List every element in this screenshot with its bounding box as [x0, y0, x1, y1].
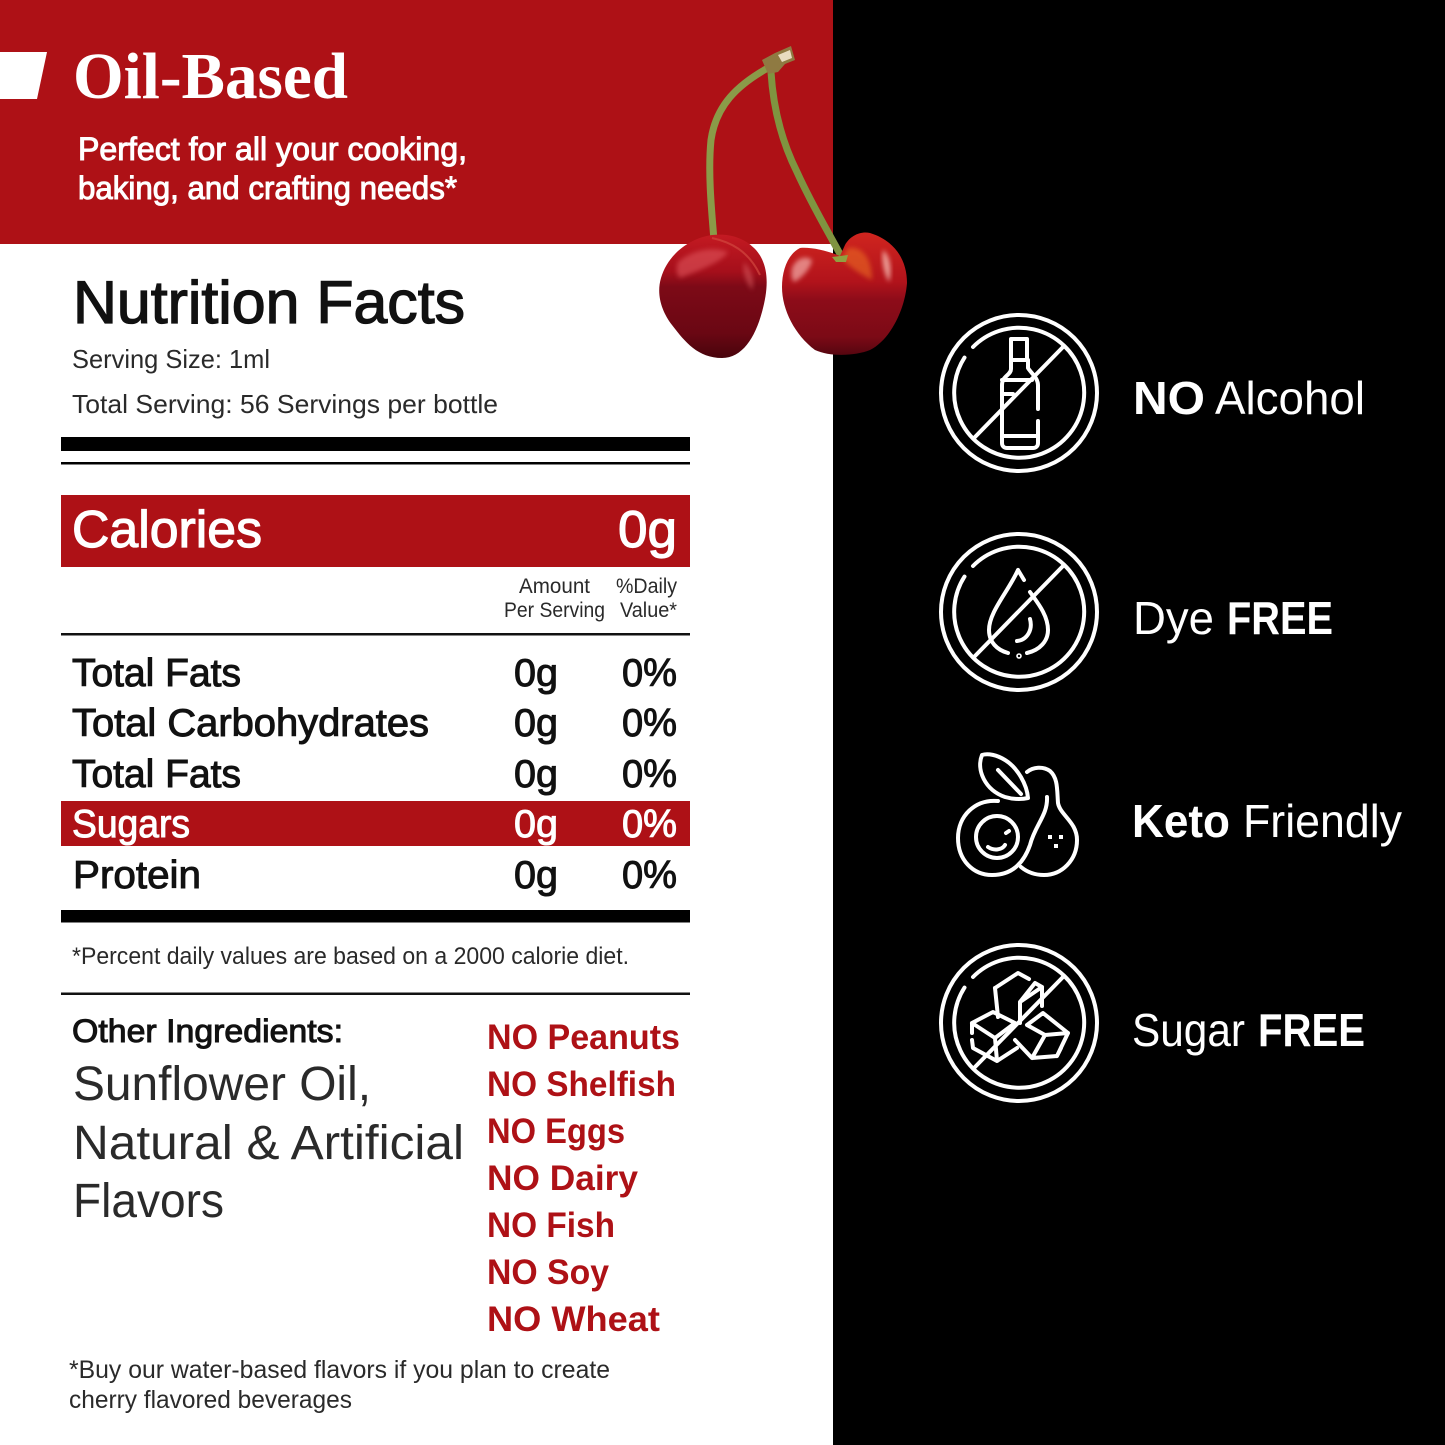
icon: avocado keto friendly [958, 754, 1077, 875]
column headers: Per Serving [504, 599, 605, 622]
text: percent daily value note: *Percent daily values are based on a 2000 calorie diet. [72, 943, 629, 970]
calories bar: 0g [618, 501, 677, 559]
nutrition table [61, 652, 690, 897]
cherry stem left [710, 69, 766, 240]
list: allergen free claims: NO Peanuts [487, 1018, 680, 1057]
text: other ingredients: Flavors [73, 1175, 224, 1228]
label: Sugar FREE [1132, 1004, 1365, 1056]
row: Total Carbohydrates: 0g [514, 702, 558, 745]
text: serving information: Serving Size: 1ml [72, 344, 270, 374]
text: other ingredients [72, 1013, 464, 1228]
label: NO Alcohol: NO [1133, 372, 1205, 424]
column headers: %Daily [616, 575, 677, 598]
row: Total Fats [72, 652, 677, 695]
row: Total Fats second [72, 753, 677, 796]
panel: red header [0, 0, 833, 244]
panel: white nutrition background [0, 244, 833, 1445]
row: Protein: Protein [73, 854, 201, 897]
row: Sugars highlighted: Sugars [72, 803, 190, 846]
row: Total Carbohydrates [72, 702, 677, 745]
row: Protein: 0g [514, 854, 558, 897]
row: Total Fats: 0% [622, 652, 677, 695]
label: Keto Friendly: Friendly [1243, 795, 1402, 847]
label: Sugar FREE: Sugar [1132, 1004, 1245, 1056]
row: Total Carbohydrates: 0% [622, 702, 677, 745]
text: other ingredients: Sunflower Oil, [73, 1058, 371, 1111]
label: Sugar FREE: FREE [1258, 1004, 1365, 1056]
cherry right [782, 233, 907, 355]
row: Total Carbohydrates: Total Carbohydrates [72, 702, 429, 745]
label: NO Alcohol [1133, 372, 1365, 424]
heading: Nutrition Facts: Nutrition Facts [73, 269, 465, 336]
row: Sugars highlighted [61, 801, 690, 846]
text: serving information [72, 344, 498, 419]
label: Dye FREE [1133, 592, 1333, 644]
row: Sugars highlighted: 0% [622, 803, 677, 846]
label: Dye FREE: FREE [1227, 592, 1333, 644]
cherry stem right [771, 72, 840, 254]
icon: white flag tab [0, 52, 47, 99]
row: Sugars highlighted: 0g [514, 803, 558, 846]
text: serving information: Total Serving: 56 Servings per bottle [72, 389, 498, 419]
row: Total Fats: 0g [514, 652, 558, 695]
text: other ingredients: Natural & Artificial [73, 1117, 464, 1170]
column headers: Amount [519, 575, 590, 598]
icon: no alcohol [941, 315, 1097, 471]
cherry stem cap [762, 46, 795, 74]
list: allergen free claims: NO Wheat [487, 1300, 660, 1339]
column headers: Value* [620, 599, 677, 622]
text: other ingredients: Other Ingredients: [72, 1013, 343, 1049]
text: footnote: *Buy our water-based flavors if you plan to create [69, 1356, 610, 1384]
row: Total Fats second: 0% [622, 753, 677, 796]
heading: Oil-Based: Oil-Based [73, 40, 348, 113]
row: Total Fats second: 0g [514, 753, 558, 796]
list: allergen free claims: NO Shelfish [487, 1065, 676, 1104]
row: Total Fats second: Total Fats [72, 753, 241, 796]
calories bar [61, 495, 690, 567]
divider: thick and thin rules [61, 437, 690, 464]
text: footnote [69, 1356, 610, 1414]
column headers [504, 575, 677, 622]
row: Total Fats: Total Fats [72, 652, 241, 695]
label: Keto Friendly: Keto [1132, 795, 1230, 847]
list: allergen free claims [487, 1018, 680, 1339]
row: Protein: 0% [622, 854, 677, 897]
label: Keto Friendly [1132, 795, 1402, 847]
cherry left [659, 235, 767, 358]
calories bar: Calories [72, 501, 262, 559]
illustration: cherries [659, 46, 907, 358]
text: header subtitle: baking, and crafting needs* [78, 170, 457, 206]
label: NO Alcohol: Alcohol [1215, 372, 1365, 424]
text: footnote: cherry flavored beverages [69, 1386, 352, 1414]
icon: dye free [941, 534, 1097, 690]
list: allergen free claims: NO Soy [487, 1253, 610, 1292]
icon: sugar free [941, 945, 1097, 1101]
text: header subtitle [78, 131, 467, 206]
label: Dye FREE: Dye [1133, 592, 1214, 644]
text: header subtitle: Perfect for all your cooking, [78, 131, 467, 167]
list: allergen free claims: NO Dairy [487, 1159, 639, 1198]
row: Protein [73, 854, 677, 897]
list: allergen free claims: NO Fish [487, 1206, 615, 1245]
list: allergen free claims: NO Eggs [487, 1112, 625, 1151]
panel: black benefits background [833, 0, 1445, 1445]
